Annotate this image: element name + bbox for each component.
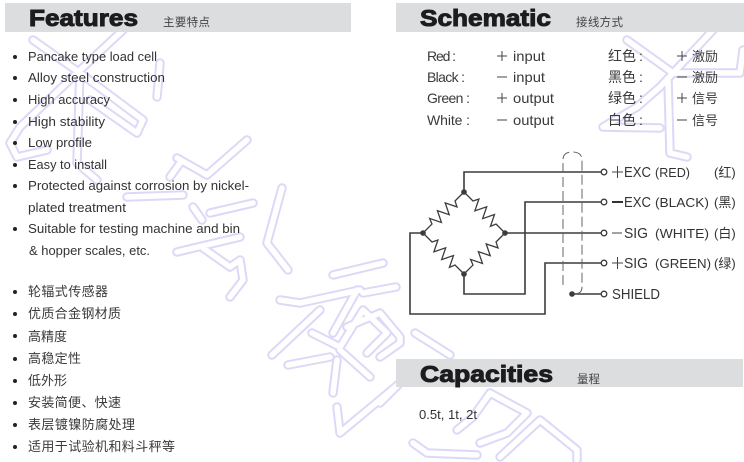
heading bar: schematic <box>396 3 744 32</box>
wires <box>410 172 602 314</box>
wiring diagram <box>410 152 607 314</box>
Chinese feature list: 适用于试验机和料斗秤等 <box>28 439 175 454</box>
subheading: schematic Chinese: 接线方式 <box>576 15 624 29</box>
terminals <box>601 169 607 297</box>
English feature list: Suitable for testing machine and bin <box>28 221 240 236</box>
English feature list: Alloy steel construction <box>28 70 165 85</box>
capacities values: 0.5t, 1t, 2t <box>419 407 477 422</box>
subheading: features Chinese: 主要特点 <box>163 15 210 29</box>
wire colour table English: input <box>513 69 545 85</box>
heading: Features: Features <box>29 5 138 31</box>
wire colour table English: output <box>513 112 554 128</box>
heading: Schematic: Schematic <box>420 5 551 31</box>
terminal labels: SIG <box>624 225 648 242</box>
wire colour table English: White : <box>427 112 470 128</box>
wire colour table Chinese: : <box>639 90 643 106</box>
wire colour table English: Red : <box>427 48 456 64</box>
wire colour table Chinese: 激励 <box>692 49 718 64</box>
English feature list <box>13 49 249 258</box>
wire colour table Chinese: 黑色 <box>608 69 636 85</box>
terminal labels <box>612 164 736 303</box>
English feature list: High accuracy <box>28 92 110 107</box>
wire colour table English: Black : <box>427 69 465 85</box>
Chinese feature list: 安装简便、快速 <box>28 395 121 410</box>
terminal labels: (白) <box>714 226 736 241</box>
terminal labels: (绿) <box>714 256 736 271</box>
terminal labels: EXC <box>624 194 651 211</box>
wire colour table Chinese: 信号 <box>692 113 718 128</box>
wire colour table Chinese: 红色 <box>608 48 636 64</box>
terminal labels: SHIELD <box>612 286 660 303</box>
terminal labels: (黑) <box>714 195 736 210</box>
heading bar: features <box>5 3 351 32</box>
terminal labels: SIG <box>624 255 648 272</box>
English feature list: Pancake type load cell <box>28 49 157 64</box>
bridge nodes <box>420 189 575 297</box>
resistor bridge <box>419 188 509 278</box>
wire colour table Chinese: 白色 <box>608 112 636 128</box>
terminal labels: EXC <box>624 164 651 181</box>
wire colour table Chinese: : <box>639 69 643 85</box>
subheading: capacities Chinese: 量程 <box>577 373 600 386</box>
terminal labels: (WHITE) <box>655 226 709 241</box>
English feature list: High stability <box>28 114 106 129</box>
wire colour table English: output <box>513 90 554 106</box>
terminal labels: (BLACK) <box>655 195 709 210</box>
Chinese feature list <box>13 284 175 454</box>
panel: capacities <box>396 359 743 422</box>
Chinese feature list: 低外形 <box>28 373 67 388</box>
terminal labels: (红) <box>714 165 736 180</box>
English feature list: plated treatment <box>28 200 126 215</box>
Chinese feature list: 轮辐式传感器 <box>28 284 108 299</box>
panel: features <box>5 3 351 454</box>
wire colour table English: input <box>513 48 545 64</box>
Chinese feature list: 高精度 <box>28 329 67 344</box>
Chinese feature list: 高稳定性 <box>28 351 81 366</box>
heading bar: capacities <box>396 359 743 387</box>
wire colour table Chinese: : <box>639 48 643 64</box>
wire colour table English <box>427 48 554 128</box>
English feature list: Easy to install <box>28 157 107 172</box>
wire colour table English: Green : <box>427 90 470 106</box>
wire colour table Chinese: 激励 <box>692 70 718 85</box>
English feature list: Low profile <box>28 135 92 150</box>
wire colour table Chinese: 信号 <box>692 91 718 106</box>
terminal labels: (GREEN) <box>655 256 711 271</box>
heading: Capacities: Capacities <box>420 361 553 387</box>
English feature list: Protected against corrosion by nickel- <box>28 178 249 193</box>
panel: schematic <box>396 3 744 314</box>
Chinese feature list: 优质合金钢材质 <box>28 306 121 321</box>
wire colour table Chinese: 绿色 <box>608 90 636 106</box>
wire colour table Chinese <box>608 48 718 128</box>
wire colour table Chinese: : <box>639 112 643 128</box>
terminal labels: (RED) <box>655 165 690 180</box>
English feature list: & hopper scales, etc. <box>29 243 150 258</box>
shield capsule <box>563 152 582 294</box>
Chinese feature list: 表层镀镍防腐处理 <box>28 417 135 432</box>
